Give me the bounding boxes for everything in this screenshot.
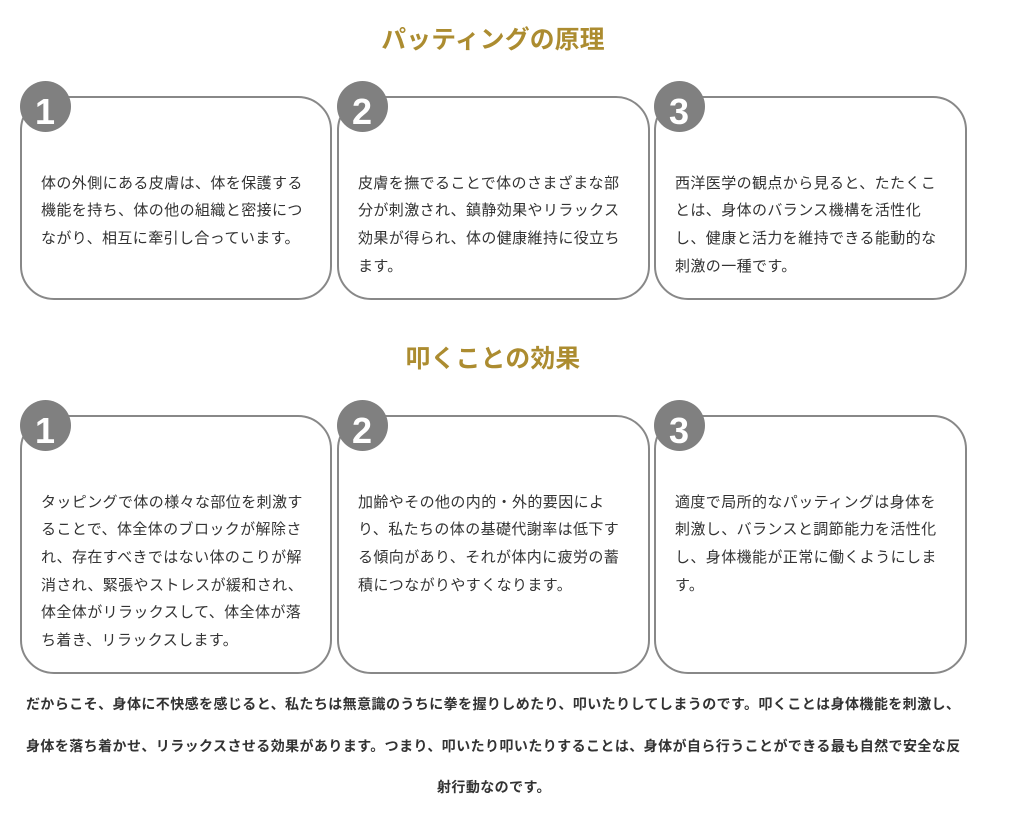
text: effect 3: す。 [675,577,704,594]
panel: principle 1 [20,96,332,300]
text: principle 1: 体の外側にある皮膚は、体を保護する [41,175,303,192]
text: principle 1: 機能を持ち、体の他の組織と密接につ [41,202,303,219]
text: effect 3: し、身体機能が正常に働くようにしま [675,549,937,566]
text: effect 2: 積につながりやすくなります。 [358,577,572,594]
conclusion line 2: 身体を落ち着かせ、リラックスさせる効果があります。つまり、叩いたり叩いたりすることは、身体が自ら行うことができる最も自然で安全な反 [26,738,961,754]
text: principle 2: ます。 [358,258,403,275]
panel: effect 1 [20,415,332,674]
text: principle 2 [358,175,620,275]
number badge 3 [654,81,704,132]
text: effect 1: 消され、緊張やストレスが緩和され、 [41,577,303,594]
panel: principle 3 [654,96,967,300]
text: principle 2: 分が刺激され、鎮静効果やリラックス [358,202,620,219]
conclusion line 3: 射行動なのです。 [437,779,551,795]
number badge 2: 2 [352,91,372,132]
text: effect 1: 体全体がリラックスして、体全体が落 [41,604,301,621]
text: effect 2: る傾向があり、それが体内に疲労の蓄 [358,549,619,566]
text: effect 3: 適度で局所的なパッティングは身体を [675,494,936,511]
text: effect 3: 刺激し、バランスと調節能力を活性化 [675,521,937,538]
number badge 3 [654,400,704,451]
text: principle 3: とは、身体のバランス機構を活性化 [675,202,921,219]
text: principle 3 [675,175,937,275]
text: effect 2: り、私たちの体の基礎代謝率は低下す [358,521,619,538]
panel: effect 2 [337,415,650,674]
text: conclusion [26,696,961,795]
heading: effects of tapping: 叩くことの効果 [406,346,580,372]
number badge 2 [336,400,388,451]
text: effect 1: タッピングで体の様々な部位を刺激す [41,494,303,511]
text: principle 2: 皮膚を撫でることで体のさまざまな部 [358,175,619,192]
text: effect 3 [675,494,937,594]
number badge 2: 2 [352,410,372,451]
heading: principle of patting: パッティングの原理 [381,26,605,54]
text: effect 1: ち着き、リラックスします。 [41,632,238,649]
number badge 3: 3 [669,410,689,451]
number badge 3: 3 [669,91,689,132]
text: principle 3: 刺激の一種です。 [675,258,797,275]
panel: effect 3 [654,415,967,674]
text: principle 2: 効果が得られ、体の健康維持に役立ち [358,230,620,247]
text: effect 2 [358,494,619,594]
text: principle 3: 西洋医学の観点から見ると、たたくこ [675,175,936,192]
text: principle 1 [41,175,303,247]
number badge 1 [20,400,70,451]
text: effect 1 [41,494,303,649]
number badge 1: 1 [35,91,55,132]
number badge 1 [20,81,70,132]
text: effect 1: ることで、体全体のブロックが解除さ [41,521,302,538]
panel: principle 2 [337,96,650,300]
text: effect 2: 加齢やその他の内的・外的要因によ [358,494,604,511]
text: effect 1: れ、存在すべきではない体のこりが解 [41,549,302,566]
conclusion line 1: だからこそ、身体に不快感を感じると、私たちは無意識のうちに拳を握りしめたり、叩いたりしてしまうのです。叩くことは身体機能を刺激し、 [26,696,960,712]
number badge 1: 1 [35,410,55,451]
number badge 2 [336,81,388,132]
text: principle 1: ながり、相互に牽引し合っています。 [41,230,300,247]
text: principle 3: し、健康と活力を維持できる能動的な [675,230,937,247]
